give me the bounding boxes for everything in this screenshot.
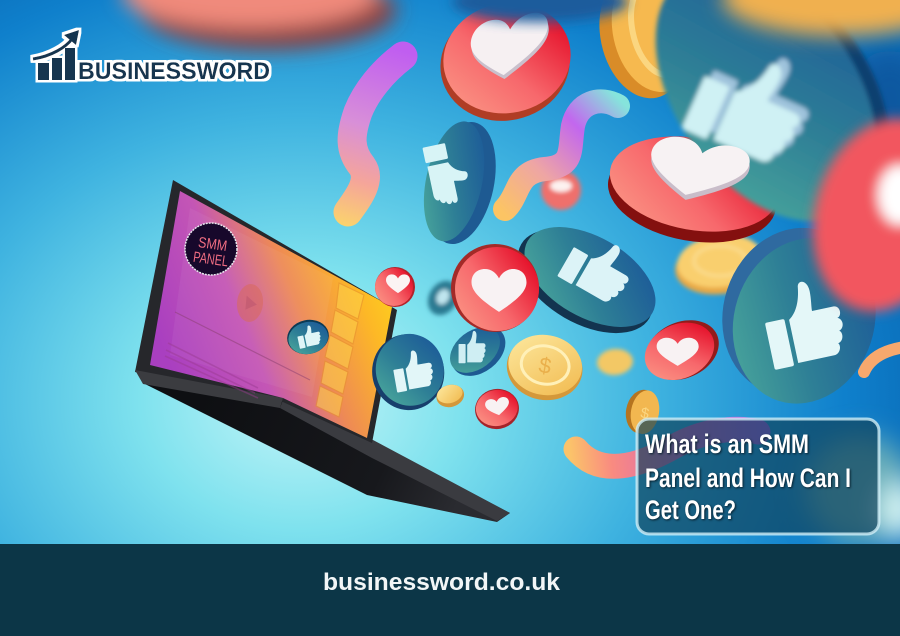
thumb disc centre (500, 204, 673, 355)
sidebar panels (316, 283, 364, 417)
large blurred thumb disc (610, 0, 900, 267)
blurred coin right (672, 229, 768, 300)
play button (235, 283, 265, 323)
heart disc middle (451, 244, 539, 332)
blurred thumb small (422, 275, 464, 321)
SMM panel badge: SMM (197, 234, 228, 255)
SMM panel badge (185, 223, 237, 275)
ribbon bottom right (864, 347, 900, 372)
small blurred heart disc (541, 170, 581, 210)
thumb disc small (437, 310, 515, 386)
title text: What is an SMM (645, 429, 809, 459)
thumb badge on screen (284, 316, 332, 358)
title text (645, 429, 851, 525)
blurred disc bottom right (805, 435, 900, 545)
title box (637, 419, 879, 534)
coin middle (502, 329, 588, 406)
heart disc top (429, 0, 582, 133)
laptop (135, 180, 510, 522)
logo text: BUSINESSWORD (78, 58, 270, 85)
blurred red disc top (122, 0, 396, 50)
thumb disc left (404, 113, 506, 250)
SMM panel badge: PANEL (192, 249, 229, 270)
timeline (175, 312, 310, 380)
coin middle: $ (537, 352, 553, 379)
heart icon on centre disc (637, 133, 755, 208)
footer url: businessword.co.uk (323, 569, 561, 596)
heart disc lower right (635, 309, 728, 392)
ribbon left (348, 56, 403, 212)
logo arrow and bars (33, 30, 79, 80)
small heart disc (472, 385, 522, 433)
laptop screen (150, 191, 392, 438)
blurred blue disc top (452, 0, 628, 22)
footer band (0, 544, 900, 636)
video panel (170, 208, 333, 397)
laptop base (143, 383, 510, 522)
blurred coin small (596, 347, 634, 377)
large blurred red disc right (792, 102, 900, 328)
logo (33, 30, 270, 85)
heart disc centre (600, 124, 786, 255)
large blurred orange disc top right (722, 0, 900, 36)
coin tilted (622, 387, 663, 436)
laptop lid (135, 180, 397, 443)
thumb disc large near laptop (366, 328, 450, 416)
coin top, partly hidden (588, 0, 708, 107)
title text: Get One? (645, 495, 736, 525)
dark blue corner glow (850, 50, 900, 150)
large thumb disc right (699, 209, 899, 422)
coin near laptop (434, 382, 467, 410)
laptop base edge (280, 400, 510, 521)
text lines (165, 343, 258, 398)
ribbon middle (505, 101, 618, 209)
coin tilted: $ (639, 405, 651, 423)
heart badge (375, 267, 415, 307)
ribbon behind title (576, 429, 758, 466)
laptop hinge (135, 370, 283, 408)
